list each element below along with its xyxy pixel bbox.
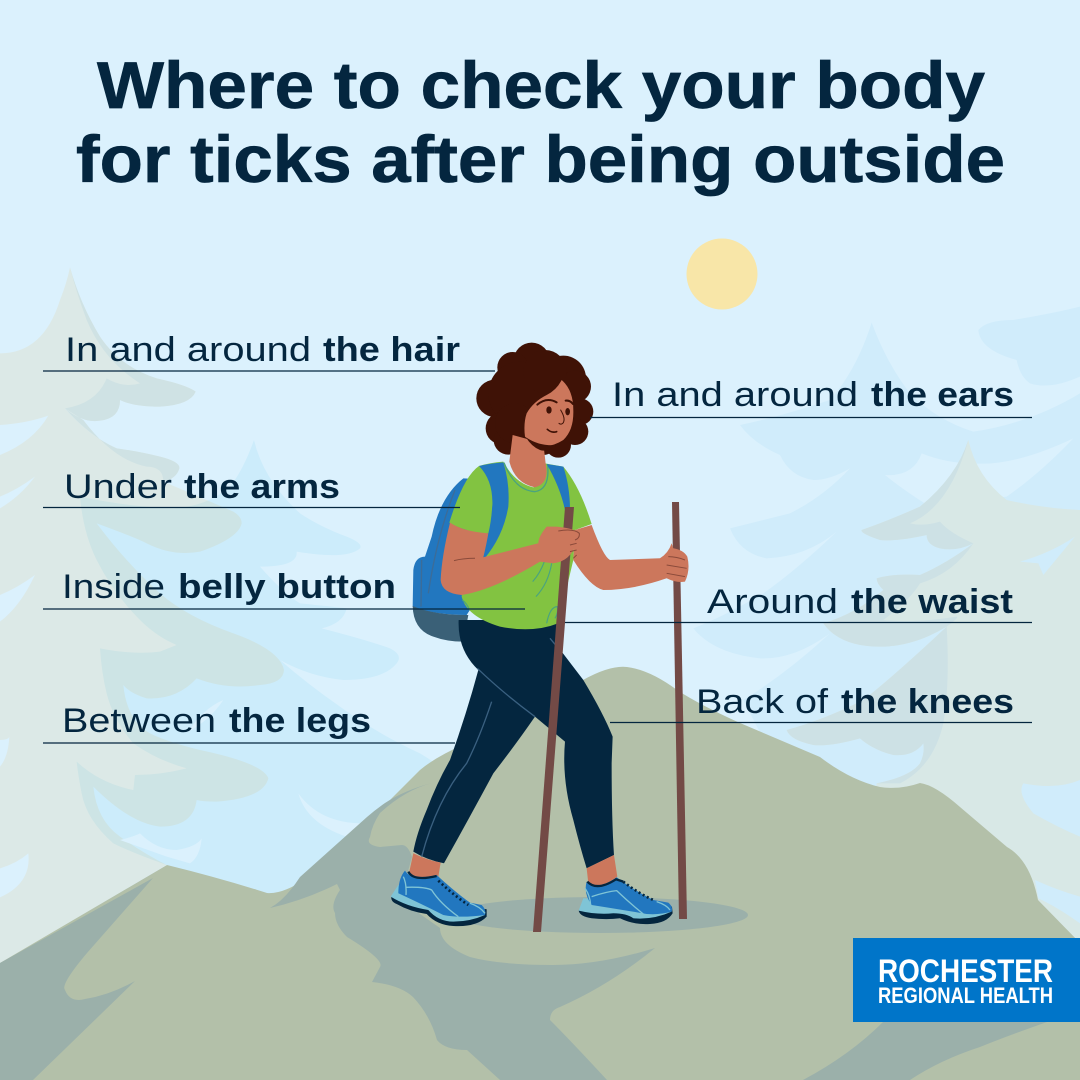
legs: [391, 620, 673, 926]
logo: Rochester Regional Health: [853, 938, 1080, 1022]
arms: [441, 523, 689, 595]
icon: hair back: [476, 343, 593, 458]
label: in and around the ears: In and around: [612, 376, 858, 414]
right arm: [573, 525, 689, 590]
left tree shaded tiers: [65, 267, 196, 482]
sleeve: [449, 466, 492, 533]
eyes, brows, nose, smile: [537, 400, 573, 432]
icon: backpack: [413, 478, 500, 642]
label: around the waist: [565, 583, 1032, 622]
label: inside belly button: belly button: [178, 568, 396, 606]
ground shadow: [452, 897, 748, 933]
label: back of the knees: Back of: [696, 683, 829, 721]
label: under the arms: Under: [64, 468, 172, 506]
near arm: [441, 523, 579, 595]
walking pole: right: [672, 502, 687, 919]
slits in left blue tree: [120, 700, 363, 863]
slit in right blue tree: [885, 438, 1073, 507]
leggings: [413, 620, 614, 868]
label: in and around the ears: the ears: [871, 376, 1014, 414]
title: for ticks after being outside: [76, 122, 1005, 196]
top right tree tip: [978, 307, 1080, 386]
centre shadow: [270, 783, 655, 1080]
label: in and around the hair: In and around: [65, 331, 311, 369]
shirt straps: [475, 462, 570, 560]
neck: [509, 435, 547, 487]
label: between the legs: Between: [62, 702, 216, 740]
icon: back shoe: [391, 871, 487, 926]
sun: [686, 238, 758, 310]
left background trees: [0, 267, 467, 963]
right background trees: [693, 307, 1080, 967]
label: in and around the hair: the hair: [323, 331, 460, 369]
mountain: [0, 667, 1080, 1080]
legging seams: [422, 638, 558, 857]
finger lines: [454, 530, 687, 577]
label: between the legs: [43, 702, 455, 743]
label: inside belly button: Inside: [62, 568, 165, 606]
left blue tree: [77, 440, 467, 927]
slits in right pale tree: [1020, 537, 1080, 923]
label: back of the knees: [610, 683, 1032, 722]
right blue tree: [693, 323, 1080, 967]
collar: [504, 463, 548, 492]
label: inside belly button: [43, 568, 525, 609]
shirt: [462, 462, 592, 629]
left pale tree: [0, 267, 284, 963]
logo: Rochester Regional Health: ROCHESTER: [878, 953, 1053, 989]
hiker: [391, 343, 689, 932]
label: in and around the ears: [590, 376, 1032, 418]
upper body back parts: [413, 478, 500, 642]
slits in left pale tree: [0, 416, 48, 897]
walking pole: left: [533, 507, 574, 932]
ankles: [409, 853, 617, 886]
chin shadow: [526, 437, 557, 451]
label: in and around the hair: [43, 331, 495, 371]
right tree shaded tiers: [787, 440, 973, 783]
left shadow: [0, 878, 153, 1080]
shirt wrinkles: [462, 562, 558, 623]
face: [524, 380, 573, 446]
label: under the arms: [43, 468, 460, 508]
label: around the waist: Around: [707, 583, 838, 621]
title: Where to check your body: [97, 48, 985, 122]
title: [76, 48, 1005, 196]
label: back of the knees: the knees: [841, 683, 1014, 721]
label: around the waist: the waist: [851, 583, 1013, 621]
mountain shadows: [0, 783, 1047, 1080]
torso and head: [449, 343, 593, 629]
right pale tree: [787, 440, 1080, 967]
icon: front shoe: [579, 877, 673, 924]
bottom right shadow: [803, 1022, 1047, 1080]
label: under the arms: the arms: [184, 468, 340, 506]
label: between the legs: the legs: [229, 702, 371, 740]
